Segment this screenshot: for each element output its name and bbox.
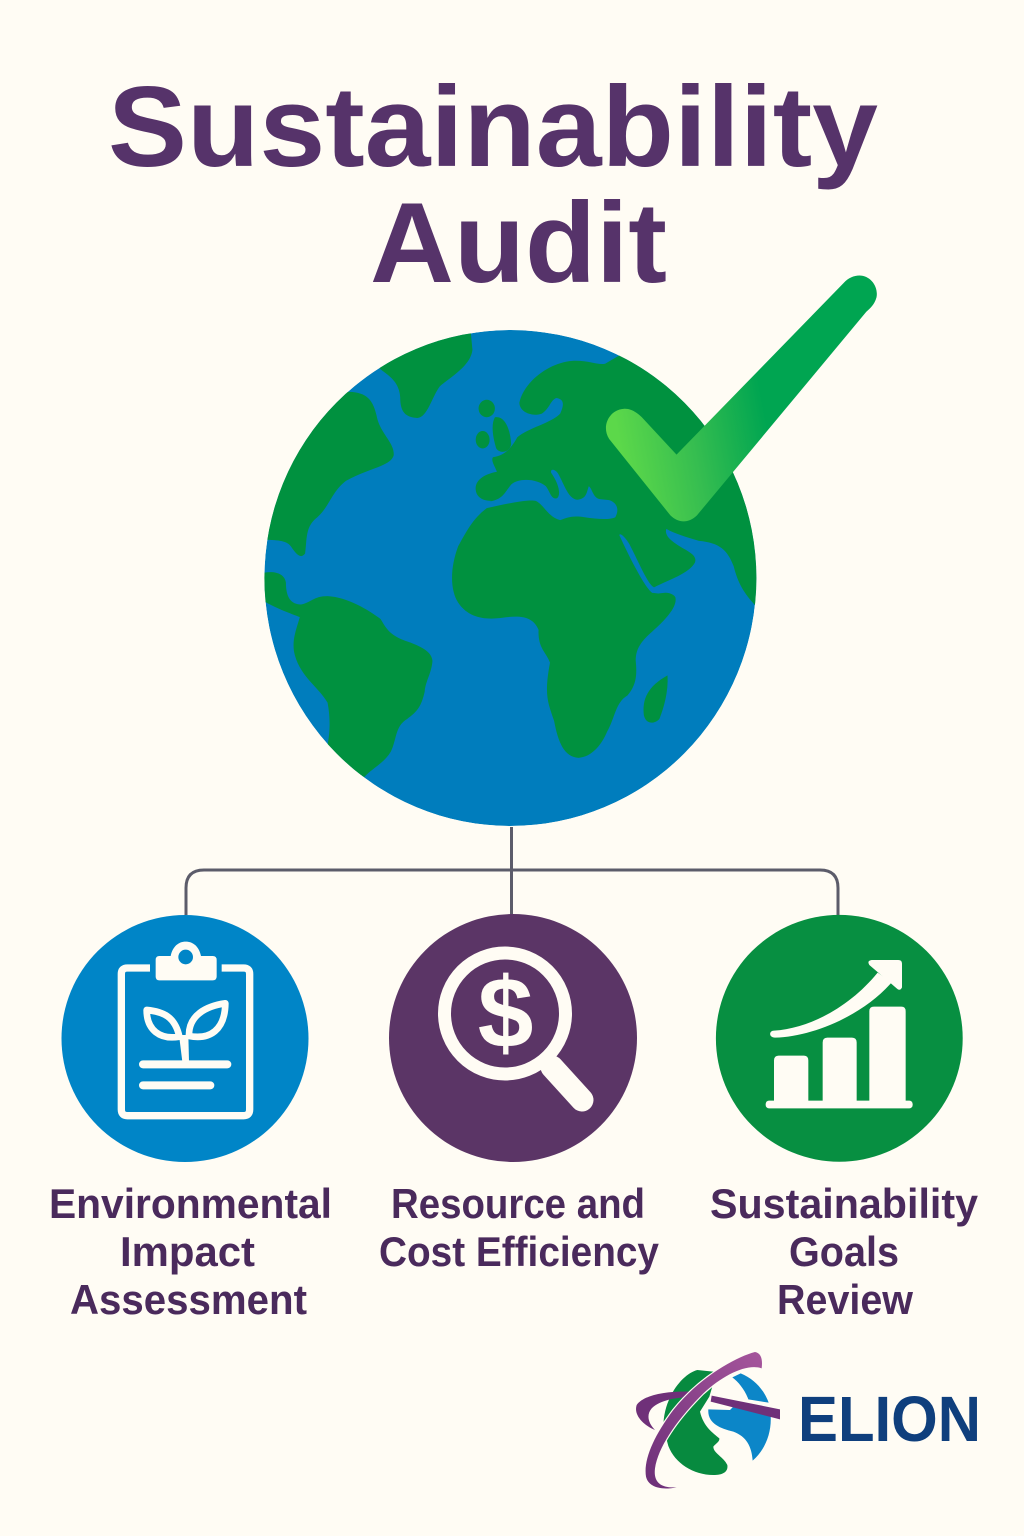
logo: Elion [636,1352,981,1488]
label: sustainability goals review: Goals [789,1228,899,1275]
logo wordmark: ELION [798,1383,981,1455]
label: environmental impact assessment: Assessment [70,1276,307,1323]
label: sustainability goals review: Review [777,1276,913,1323]
icon: clipboard with sprout [121,942,250,1116]
label: environmental impact assessment: Environmental [49,1180,332,1227]
title: Sustainability [108,64,878,191]
title: Audit [370,180,667,307]
label: environmental impact assessment: Impact [120,1228,255,1275]
label: sustainability goals review [710,1180,979,1323]
icon: rising bar chart with arrow [766,960,913,1108]
panel: resource and cost efficiency icon [389,914,637,1162]
label: resource and cost efficiency: Cost Efficiency [379,1228,660,1275]
checkmark [606,275,877,521]
label: environmental impact assessment [49,1180,332,1323]
icon: magnifying glass with dollar sign [444,953,582,1100]
connector lines [186,827,838,915]
logo mark [636,1352,780,1488]
label: resource and cost efficiency [379,1180,660,1275]
label: resource and cost efficiency: Resource and [391,1180,645,1227]
panel: environmental impact assessment icon [62,915,308,1162]
globe illustration [254,325,781,826]
icon: magnifying glass with dollar sign: $ [478,957,533,1069]
label: sustainability goals review: Sustainability [710,1180,979,1227]
panel: sustainability goals review icon [716,915,963,1162]
title [108,64,878,307]
